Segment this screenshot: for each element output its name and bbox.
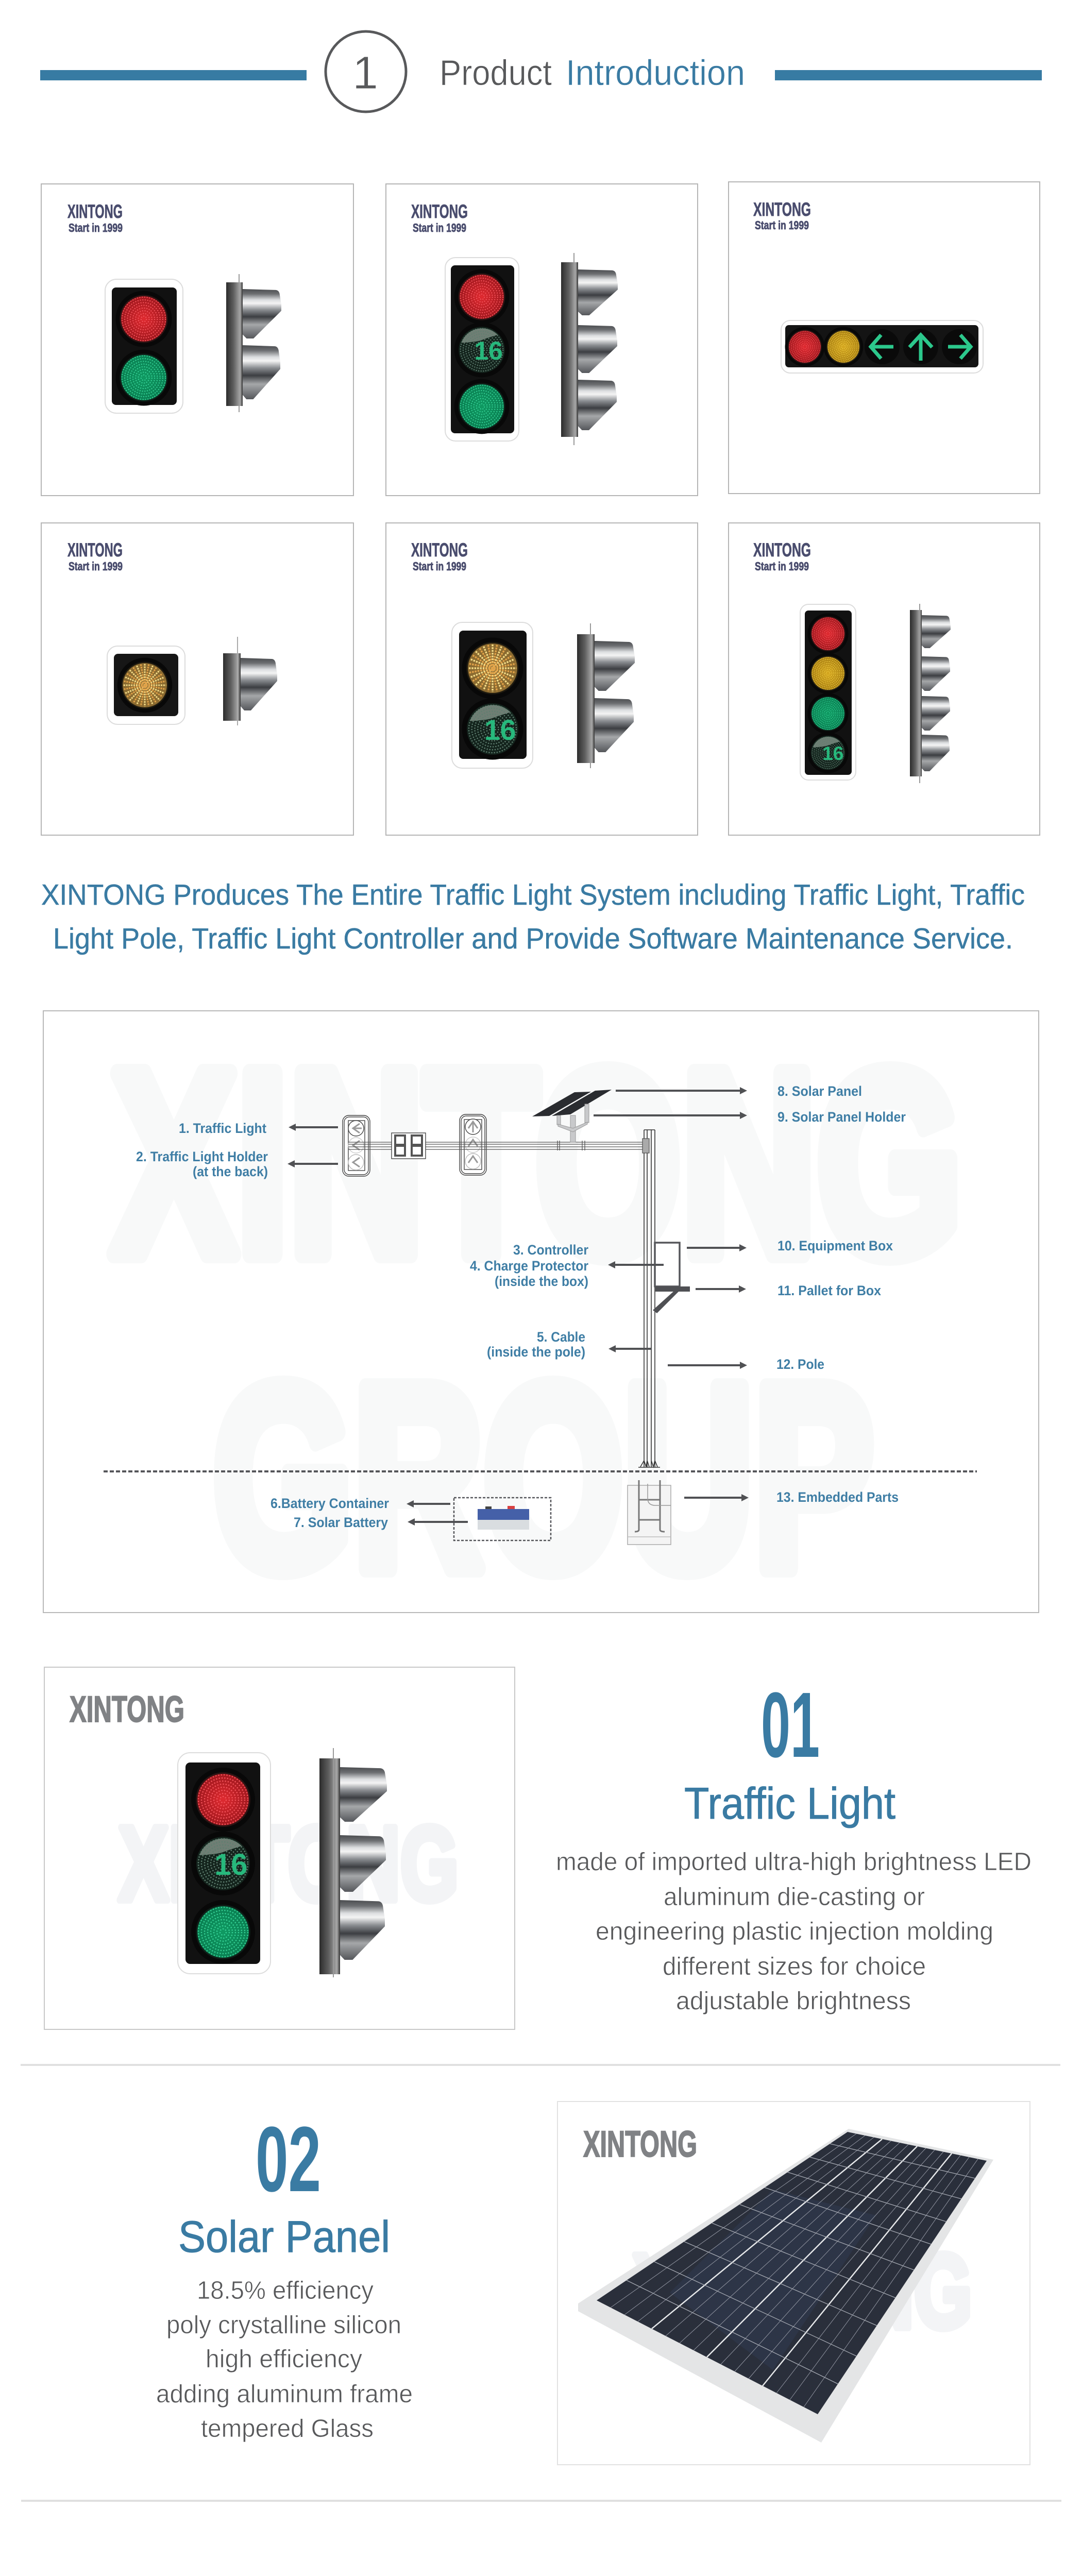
logo: XINTONG bbox=[67, 539, 123, 561]
feature list: adjustable brightness bbox=[676, 1987, 911, 2015]
feature list: poly crystalline silicon bbox=[166, 2311, 401, 2339]
text block: traffic light bbox=[556, 1673, 1032, 2015]
panel: product 5, full-colour and countdown light bbox=[386, 523, 698, 835]
label 2: (at the back) bbox=[193, 1164, 268, 1179]
heading: Traffic Light bbox=[684, 1779, 895, 1828]
traffic light side bbox=[561, 253, 618, 445]
traffic light side bbox=[226, 274, 281, 412]
solar panel holder bbox=[557, 1104, 589, 1142]
logo bbox=[753, 539, 811, 573]
feature list bbox=[556, 1848, 1032, 2015]
label 5 bbox=[487, 1329, 585, 1360]
label 9: 9. Solar Panel Holder bbox=[777, 1109, 906, 1125]
label 2: 2. Traffic Light Holder bbox=[136, 1149, 268, 1164]
intro paragraph: XINTONG Produces The Entire Traffic Light System including Traffic Light, Traffic bbox=[41, 878, 1025, 911]
horizontal traffic light bbox=[781, 320, 983, 373]
logo: XINTONG bbox=[67, 201, 123, 222]
arrow 5 bbox=[608, 1345, 652, 1352]
header left bar bbox=[40, 70, 307, 80]
label 8: 8. Solar Panel bbox=[777, 1083, 862, 1099]
traffic light front bbox=[445, 258, 519, 441]
label 10: 10. Equipment Box bbox=[777, 1238, 893, 1253]
pole bbox=[638, 1130, 660, 1467]
header title blue word: Introduction bbox=[566, 53, 745, 93]
label 3 and 4: 3. Controller bbox=[513, 1242, 588, 1258]
feature list: adding aluminum frame bbox=[156, 2380, 413, 2408]
intro paragraph bbox=[41, 878, 1025, 955]
arrow 12 bbox=[668, 1362, 747, 1369]
traffic light side bbox=[223, 637, 277, 725]
solar panel bbox=[532, 1090, 612, 1116]
logo: XINTONG bbox=[70, 1689, 184, 1730]
logo bbox=[411, 539, 468, 573]
label 2 bbox=[136, 1149, 268, 1179]
label 6: 6.Battery Container bbox=[270, 1496, 389, 1511]
arrow 9 bbox=[594, 1112, 747, 1119]
logo: Start in 1999 bbox=[413, 560, 466, 573]
logo bbox=[67, 539, 123, 573]
feature list: tempered Glass bbox=[201, 2415, 374, 2443]
header title: Product bbox=[439, 53, 552, 93]
countdown display bbox=[392, 1133, 426, 1159]
section number circle bbox=[326, 31, 406, 112]
panel: product 2, red, countdown and green light bbox=[386, 184, 698, 496]
number 01: 01 bbox=[761, 1673, 820, 1777]
solar panel module bbox=[578, 2129, 993, 2443]
label 3 and 4: 4. Charge Protector bbox=[470, 1258, 588, 1274]
arrow 7 bbox=[408, 1518, 468, 1526]
label 3 and 4 bbox=[470, 1242, 588, 1289]
traffic light side bbox=[577, 623, 635, 768]
logo: XINTONG bbox=[583, 2124, 697, 2165]
intro paragraph: Light Pole, Traffic Light Controller and Provide Software Maintenance Service. bbox=[53, 922, 1013, 955]
left signal head bbox=[343, 1115, 370, 1176]
traffic light front bbox=[452, 622, 533, 768]
panel: system diagram bbox=[43, 1011, 1039, 1624]
labels and arrows bbox=[136, 1083, 906, 1530]
feature list: high efficiency bbox=[206, 2345, 362, 2373]
feature list bbox=[156, 2277, 413, 2443]
logo: XINTONG bbox=[411, 201, 468, 222]
arrow 11 bbox=[696, 1285, 746, 1293]
battery container bbox=[454, 1498, 551, 1540]
feature list: different sizes for choice bbox=[663, 1953, 926, 1980]
arm bbox=[348, 1139, 649, 1153]
label 7: 7. Solar Battery bbox=[294, 1515, 388, 1530]
logo: XINTONG bbox=[753, 539, 811, 561]
traffic light side bbox=[910, 604, 951, 783]
logo: Start in 1999 bbox=[69, 221, 123, 234]
traffic light side bbox=[319, 1748, 387, 1977]
arrow 2 bbox=[288, 1160, 338, 1167]
feature list: 18.5% efficiency bbox=[197, 2277, 374, 2304]
equipment box bbox=[655, 1243, 680, 1286]
logo: XINTONG bbox=[411, 539, 468, 561]
arrow 3 and 4 bbox=[608, 1261, 664, 1268]
solar battery bbox=[478, 1506, 529, 1530]
panel: product 4, single full-colour light bbox=[41, 523, 353, 835]
section number circle: 1 bbox=[352, 47, 378, 99]
logo: Start in 1999 bbox=[69, 560, 123, 573]
label 13: 13. Embedded Parts bbox=[776, 1489, 899, 1505]
arrow 8 bbox=[616, 1087, 747, 1094]
logo bbox=[753, 199, 811, 232]
label 5: (inside the pole) bbox=[487, 1344, 585, 1360]
logo: Start in 1999 bbox=[413, 221, 466, 234]
ground line bbox=[104, 1470, 977, 1472]
arrow 10 bbox=[687, 1244, 747, 1251]
logo bbox=[67, 201, 123, 234]
feature list: made of imported ultra-high brightness LED bbox=[556, 1848, 1032, 1876]
panel: product 6, four-lamp vertical light bbox=[729, 523, 1040, 835]
text block: solar panel bbox=[156, 2108, 413, 2443]
divider bbox=[21, 2064, 1060, 2066]
feature list: engineering plastic injection molding bbox=[596, 1918, 993, 1945]
traffic light front bbox=[107, 646, 185, 724]
label 11: 11. Pallet for Box bbox=[777, 1283, 881, 1298]
panel: traffic light photo bbox=[44, 1667, 515, 2029]
feature list: aluminum die-casting or bbox=[664, 1883, 925, 1911]
heading: Solar Panel bbox=[178, 2212, 390, 2262]
embedded parts bbox=[628, 1480, 671, 1545]
arrow 1 bbox=[289, 1124, 338, 1131]
label 3 and 4: (inside the box) bbox=[495, 1274, 588, 1289]
logo bbox=[411, 201, 468, 234]
logo: Start in 1999 bbox=[755, 560, 809, 573]
label 1: 1. Traffic Light bbox=[179, 1121, 266, 1136]
arrow 6 bbox=[407, 1500, 450, 1507]
panel: solar panel photo bbox=[557, 2102, 1030, 2465]
traffic light front bbox=[105, 279, 183, 413]
logo: XINTONG bbox=[753, 199, 811, 220]
panel: product 1, red and green light bbox=[41, 184, 353, 496]
label 5: 5. Cable bbox=[537, 1329, 585, 1345]
logo: Start in 1999 bbox=[755, 218, 809, 232]
right signal head bbox=[460, 1114, 486, 1175]
section header bbox=[40, 31, 1042, 112]
traffic light front bbox=[178, 1753, 270, 1974]
bottom divider bbox=[21, 2500, 1061, 2502]
label 12: 12. Pole bbox=[776, 1357, 824, 1372]
traffic light front bbox=[800, 604, 856, 780]
watermark: XINTONG bbox=[119, 1805, 459, 1923]
panel: product 3, horizontal arrow light bbox=[729, 182, 1040, 494]
header right bar bbox=[775, 70, 1042, 80]
pallet for box bbox=[653, 1286, 690, 1313]
arrow 13 bbox=[684, 1494, 749, 1501]
number 02: 02 bbox=[256, 2108, 321, 2211]
